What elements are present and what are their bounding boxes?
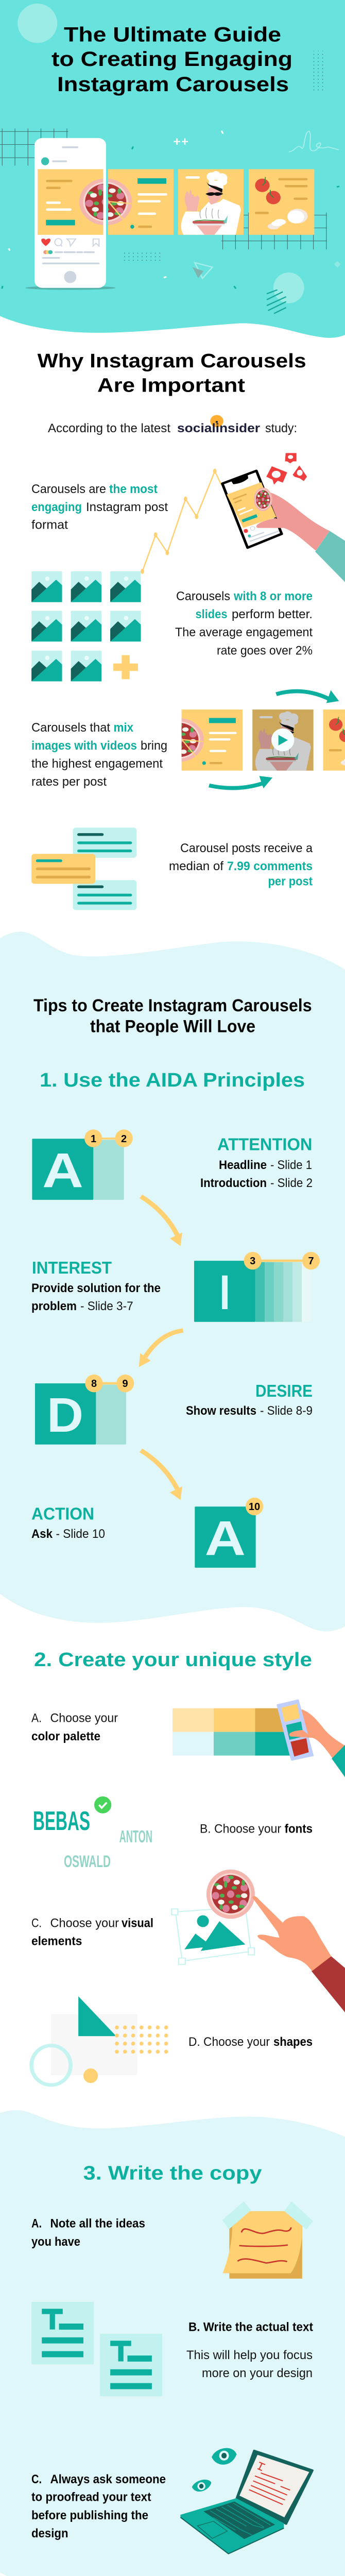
text: action: Ask — [31, 1527, 53, 1541]
text: 8 or more slides: Carousels — [176, 589, 230, 603]
text: choose visual elements: Choose your — [50, 1916, 119, 1930]
text: write the actual text: more on your design — [202, 2366, 313, 2380]
text: comments per post: per post — [268, 875, 313, 888]
text: attention: ATTENTION — [217, 1134, 312, 1154]
text: choose visual elements: visual — [122, 1916, 153, 1930]
illustration: font samples — [33, 1797, 152, 1871]
illustration: phone with carousel slides — [34, 138, 314, 288]
heading: tips: Tips to Create Instagram Carousels — [33, 996, 312, 1015]
heading: tips — [33, 996, 312, 1037]
text: 8 or more slides: The average engagement — [175, 625, 313, 639]
illustration: text documents — [31, 2302, 162, 2396]
text: according to the latest socialinsider study: study: — [265, 421, 297, 435]
illustration: font samples: BEBAS — [33, 1806, 90, 1836]
illustration: eight slides grid — [31, 571, 141, 682]
text: choose visual elements: elements — [31, 1935, 82, 1948]
text: 8 or more slides: slides — [196, 607, 228, 621]
text: 8 or more slides: perform better. — [232, 607, 313, 621]
text: write the actual text: This will help you focus — [186, 2348, 313, 2362]
icon: eye small — [192, 2480, 211, 2492]
text: proofread: Always ask someone — [50, 2472, 166, 2486]
text: desire — [186, 1381, 313, 1418]
text: choose shapes — [188, 2035, 313, 2049]
icon: phone body — [34, 138, 106, 288]
title: Instagram Carousels — [57, 73, 289, 96]
text: interest: problem — [31, 1299, 77, 1313]
text: mix images with videos — [31, 721, 167, 789]
text: most engaging format: the most — [109, 482, 158, 496]
text: most engaging format — [31, 482, 168, 532]
chart line — [141, 469, 221, 574]
arrows — [209, 690, 339, 788]
card: interest slides 3-7 — [194, 1252, 320, 1322]
text: according to the latest socialinsider study — [48, 415, 297, 435]
text: attention — [200, 1134, 313, 1190]
text: 8 or more slides: rate goes over 2% — [217, 643, 313, 657]
card: attention slides 1-2: 1 — [91, 1133, 96, 1145]
text: most engaging format: format — [31, 518, 68, 532]
text: proofread — [31, 2472, 166, 2540]
card: interest slides 3-7: 7 — [308, 1256, 314, 1267]
card: desire slides 8-9: D — [47, 1388, 83, 1443]
text: note all the ideas: Note all the ideas — [50, 2217, 145, 2231]
decorative header textures — [0, 4, 341, 313]
text: most engaging format: Carousels are — [31, 482, 106, 496]
text: according to the latest socialinsider study: socialinsider — [177, 421, 260, 435]
heading: why carousels are important: Are Important — [97, 375, 245, 397]
card: desire slides 8-9: 9 — [122, 1378, 128, 1389]
illustration: color palette with hand — [173, 1700, 345, 1777]
text: choose shapes: D. Choose your — [188, 2035, 270, 2049]
text: proofread: C. — [31, 2472, 42, 2486]
card: action slide 10: 10 — [249, 1501, 260, 1513]
card: attention slides 1-2: A — [42, 1143, 83, 1198]
card: action slide 10 — [195, 1498, 263, 1568]
text: interest: - Slide 3-7 — [80, 1299, 133, 1313]
text: choose fonts: B. Choose your — [200, 1822, 281, 1836]
text: mix images with videos: images with videos — [31, 739, 137, 753]
illustration: laptop with eyes — [180, 2448, 313, 2554]
text: choose color palette — [31, 1711, 118, 1743]
text: desire: DESIRE — [255, 1381, 313, 1400]
text: mix images with videos: the highest engagement — [31, 757, 163, 771]
heading: why carousels are important — [38, 350, 306, 397]
heading: create your unique style: 2. Create your unique style — [34, 1649, 312, 1671]
heading: why carousels are important: Why Instagram Carousels — [38, 350, 306, 372]
text: note all the ideas: you have — [31, 2235, 80, 2249]
text: comments per post — [169, 841, 313, 888]
text: attention: - Slide 1 — [270, 1158, 312, 1172]
illustration: growth line with hand holding phone — [141, 453, 345, 582]
text: mix images with videos: mix — [113, 721, 134, 735]
text: most engaging format: Instagram post — [86, 500, 168, 514]
panel: tips section background — [0, 931, 345, 1631]
illustration: font samples: ANTON — [119, 1827, 152, 1846]
text: comments per post: median of — [169, 859, 223, 873]
illustration: sticky note — [222, 2201, 313, 2279]
text: note all the ideas — [31, 2217, 145, 2249]
arrow: attention to interest — [141, 1196, 182, 1246]
title — [51, 23, 292, 96]
illustration: font samples: OSWALD — [64, 1852, 111, 1871]
text: 8 or more slides — [175, 589, 313, 657]
text: choose color palette: Choose your — [50, 1711, 118, 1725]
text: desire: Show results — [186, 1404, 256, 1418]
text: interest — [31, 1258, 161, 1313]
icon: eye large — [212, 2448, 236, 2465]
card: desire slides 8-9: 8 — [91, 1378, 97, 1389]
text: proofread: design — [31, 2527, 68, 2540]
card: interest slides 3-7: 3 — [250, 1256, 255, 1267]
text: action — [31, 1504, 105, 1541]
card: action slide 10: A — [205, 1511, 246, 1566]
text: action: ACTION — [31, 1504, 94, 1523]
text: action: - Slide 10 — [56, 1527, 105, 1541]
illustration: shapes — [31, 1996, 168, 2085]
text: comments per post: 7.99 comments — [227, 859, 313, 873]
text: comments per post: Carousel posts receive a — [180, 841, 313, 855]
card: interest slides 3-7: I — [219, 1265, 230, 1320]
text: interest: INTEREST — [32, 1258, 112, 1277]
illustration: comment cards — [31, 827, 136, 910]
card: attention slides 1-2: 2 — [121, 1133, 127, 1145]
text: attention: Introduction — [200, 1176, 267, 1190]
heading: tips: that People Will Love — [90, 1017, 255, 1037]
title: to Creating Engaging — [51, 48, 292, 71]
text: note all the ideas: A. — [31, 2217, 42, 2231]
arrow: desire to action — [141, 1450, 182, 1500]
text: choose color palette: color palette — [31, 1730, 100, 1743]
panel: write the copy background — [0, 2110, 345, 2576]
text: write the actual text: B. Write the actual text — [188, 2320, 313, 2334]
illustration: pizza and image with pointing hand — [171, 1870, 345, 2012]
text: most engaging format: engaging — [31, 500, 82, 514]
heading: write the copy: 3. Write the copy — [83, 2163, 262, 2184]
text: proofread: before publishing the — [31, 2509, 148, 2522]
illustration: carousel with video slide and arrows — [181, 689, 345, 790]
text: according to the latest socialinsider study: According to the latest — [48, 421, 170, 435]
text: attention: - Slide 2 — [270, 1176, 313, 1190]
text: mix images with videos: bring — [141, 739, 167, 753]
text: choose visual elements: C. — [31, 1916, 42, 1930]
text: attention: Headline — [219, 1158, 267, 1172]
text: choose visual elements — [31, 1916, 153, 1948]
text: choose color palette: A. — [31, 1711, 42, 1725]
arrow: interest to desire — [139, 1331, 183, 1367]
panel: header background — [0, 0, 345, 338]
text: proofread: to proofread your text — [31, 2490, 151, 2504]
card: attention slides 1-2 — [32, 1129, 133, 1200]
text: 8 or more slides: with 8 or more — [233, 589, 313, 603]
text: mix images with videos: Carousels that — [31, 721, 110, 735]
card: desire slides 8-9 — [35, 1375, 134, 1445]
text: choose fonts: fonts — [285, 1822, 313, 1836]
text: choose shapes: shapes — [273, 2035, 313, 2049]
text: desire: - Slide 8-9 — [260, 1404, 313, 1418]
text: interest: Provide solution for the — [31, 1281, 161, 1295]
text: mix images with videos: rates per post — [31, 775, 107, 789]
title: The Ultimate Guide — [64, 23, 281, 46]
heading: use the aida principles: 1. Use the AIDA Principles — [40, 1070, 305, 1091]
icon: like notifications — [266, 453, 307, 485]
text: write the actual text — [186, 2320, 313, 2380]
